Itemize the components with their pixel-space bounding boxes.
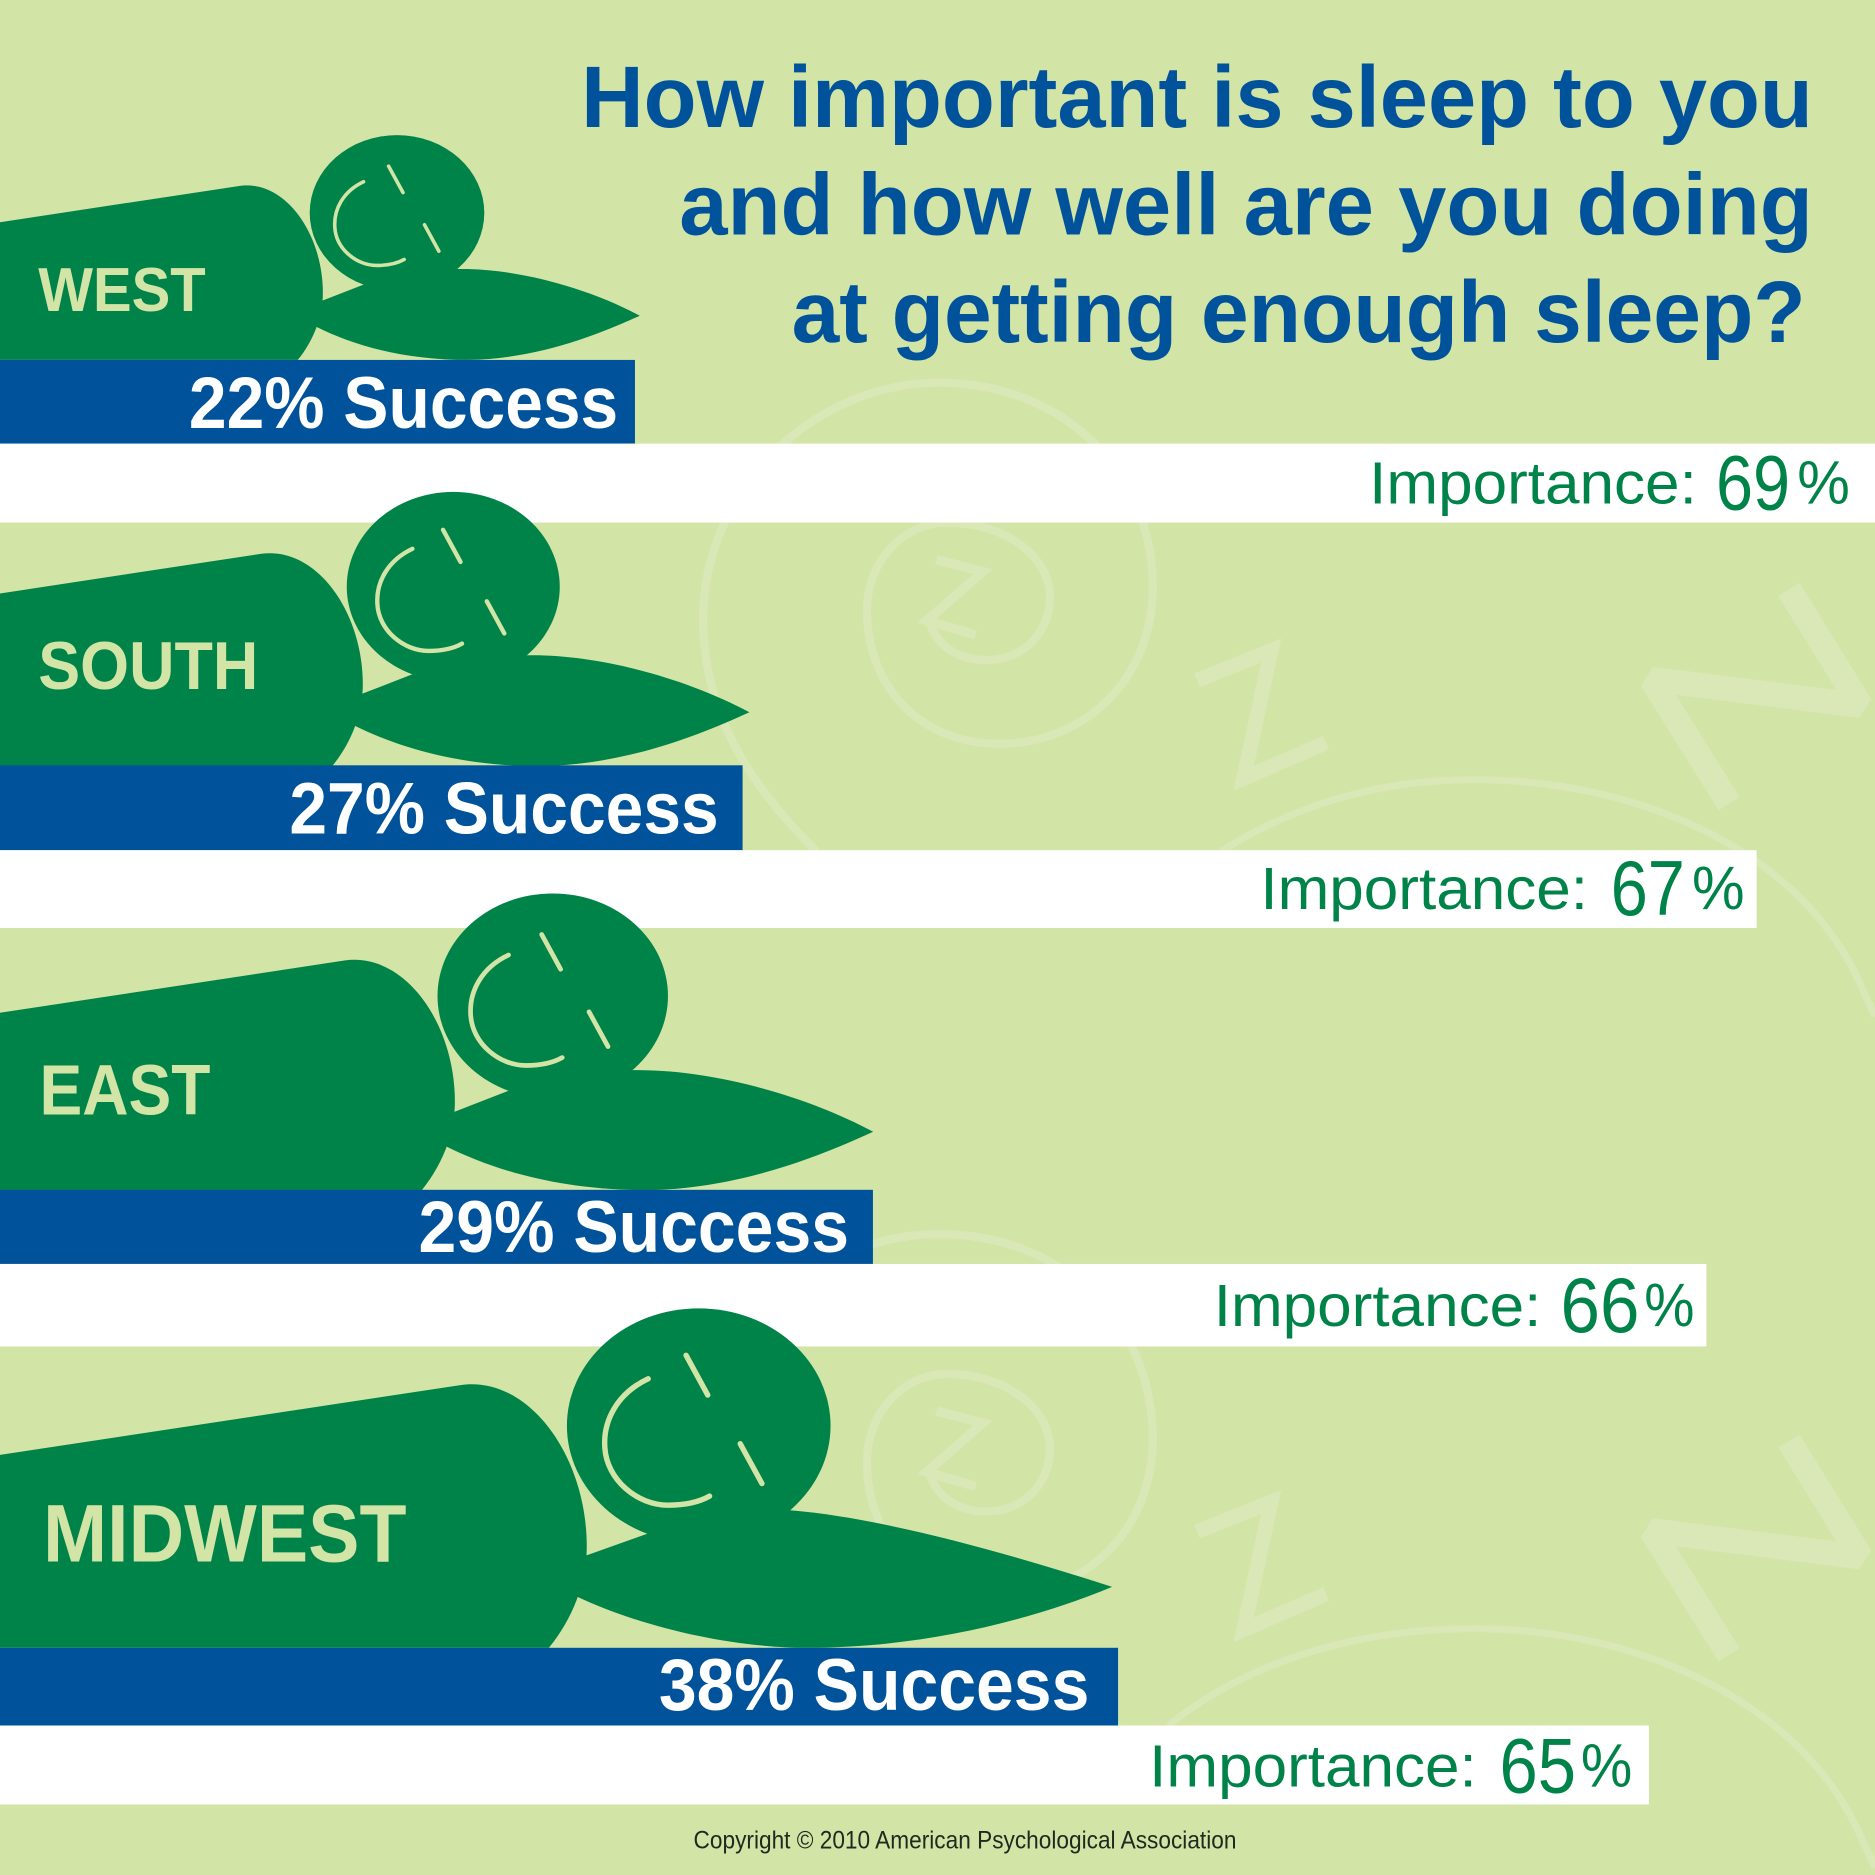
importance value: East: % xyxy=(1644,1271,1694,1339)
success value: South: 27% Success xyxy=(289,768,719,849)
importance value: West xyxy=(1369,440,1850,526)
sleeping figure: South xyxy=(0,492,749,766)
success value: West: 22% Success xyxy=(189,363,618,444)
success bar: West xyxy=(0,360,635,444)
background pattern: swirls and Z letters xyxy=(703,383,1875,1868)
importance value: Midwest xyxy=(1149,1723,1632,1809)
importance value: Midwest: % xyxy=(1581,1732,1632,1800)
importance value: South: % xyxy=(1692,854,1745,922)
importance bar: Midwest xyxy=(0,1726,1649,1804)
region label: East: EAST xyxy=(39,1050,211,1130)
importance value: East xyxy=(1214,1263,1694,1349)
success bar: South xyxy=(0,765,743,850)
importance value: South: 67 xyxy=(1611,846,1685,932)
region label: South: SOUTH xyxy=(38,628,258,704)
importance value: South xyxy=(1260,846,1745,932)
sleeping figure: Midwest xyxy=(0,1308,1112,1648)
importance value: East: Importance: xyxy=(1214,1272,1541,1339)
importance value: West: Importance: xyxy=(1369,449,1697,516)
title: How important is sleep to you xyxy=(581,49,1813,146)
region label: West: WEST xyxy=(38,256,206,325)
copyright: Copyright © 2010 American Psychological Association xyxy=(694,1827,1236,1855)
title xyxy=(581,49,1813,361)
success bar: East xyxy=(0,1190,873,1264)
title: and how well are you doing xyxy=(679,156,1813,253)
success bar: Midwest xyxy=(0,1648,1118,1726)
importance bar: West xyxy=(0,444,1875,523)
success value: Midwest: 38% Success xyxy=(659,1645,1089,1726)
sleeping figure: West xyxy=(0,135,640,360)
importance value: South: Importance: xyxy=(1260,855,1588,922)
importance value: Midwest: Importance: xyxy=(1149,1733,1477,1800)
importance bar: East xyxy=(0,1264,1706,1346)
importance value: East: 66 xyxy=(1561,1263,1639,1349)
region label: Midwest: MIDWEST xyxy=(43,1489,407,1580)
importance value: Midwest: 65 xyxy=(1500,1723,1576,1809)
importance bar: South xyxy=(0,850,1757,928)
title: at getting enough sleep? xyxy=(792,264,1806,361)
sleeping figure: East xyxy=(0,893,873,1190)
importance value: West: % xyxy=(1797,448,1850,516)
success value: East: 29% Success xyxy=(419,1187,849,1268)
importance value: West: 69 xyxy=(1716,440,1790,526)
